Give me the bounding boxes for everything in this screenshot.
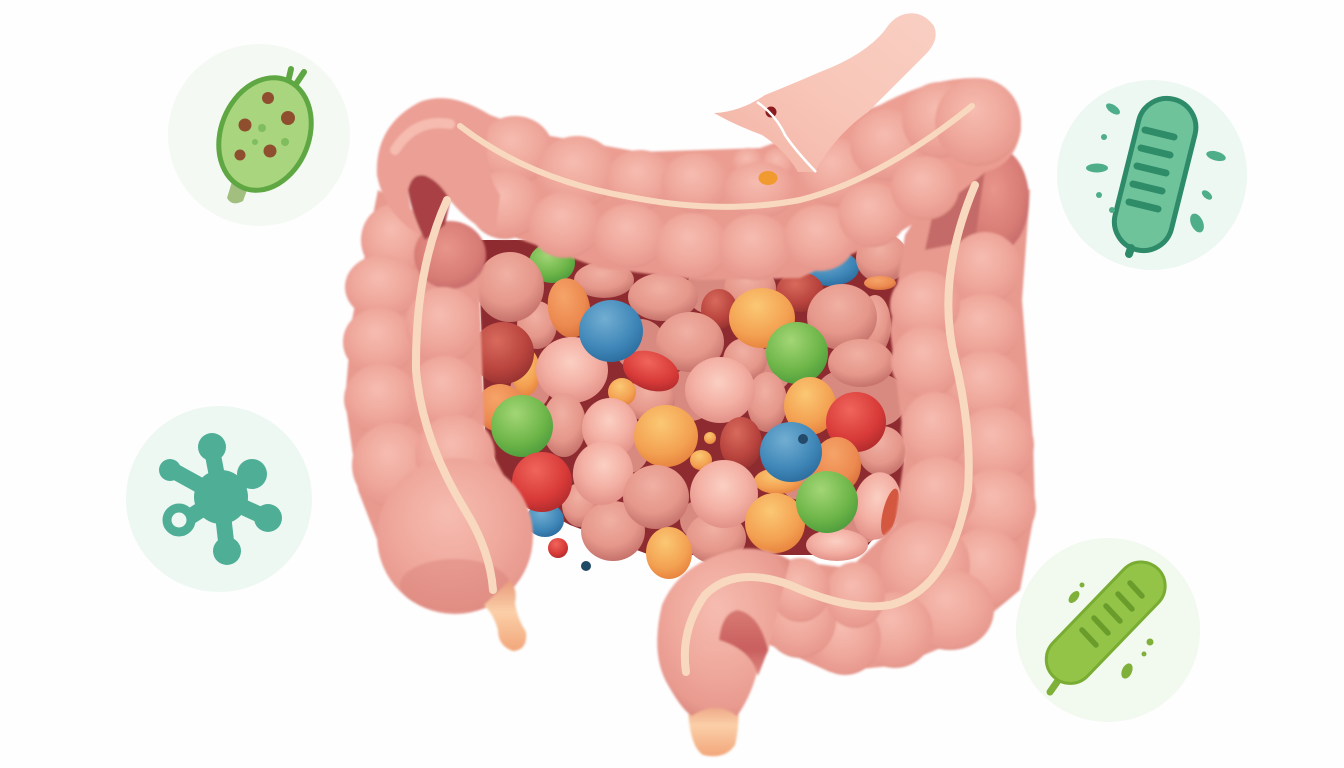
icon: green spotted bacterium xyxy=(202,64,328,204)
icon: green rod bacterium xyxy=(1036,552,1175,693)
small orange dot xyxy=(758,171,778,185)
panel: top-right microbe xyxy=(1057,80,1247,270)
descending colon (right) xyxy=(718,148,1036,675)
ascending colon (left) xyxy=(343,190,533,614)
panel: top-left microbe xyxy=(168,44,350,226)
panel: bottom-right microbe xyxy=(1016,538,1200,722)
stripes xyxy=(416,106,975,672)
icon: teal capsule bacterium xyxy=(1086,92,1227,257)
top stripe xyxy=(460,106,972,207)
loose pellets xyxy=(548,538,568,558)
left stripe xyxy=(416,200,493,590)
filler pellets behind xyxy=(510,266,906,544)
transverse colon xyxy=(377,78,1021,280)
rectum xyxy=(657,548,790,756)
panel: bottom-left microbe xyxy=(126,406,312,592)
lower stripe xyxy=(685,185,975,672)
appendix drip xyxy=(484,580,526,651)
icon: teal star microbe xyxy=(159,433,282,565)
appendix tube xyxy=(714,13,936,172)
colon interior with pellets xyxy=(472,233,908,579)
colon body xyxy=(343,78,1036,756)
interior background xyxy=(478,240,905,555)
